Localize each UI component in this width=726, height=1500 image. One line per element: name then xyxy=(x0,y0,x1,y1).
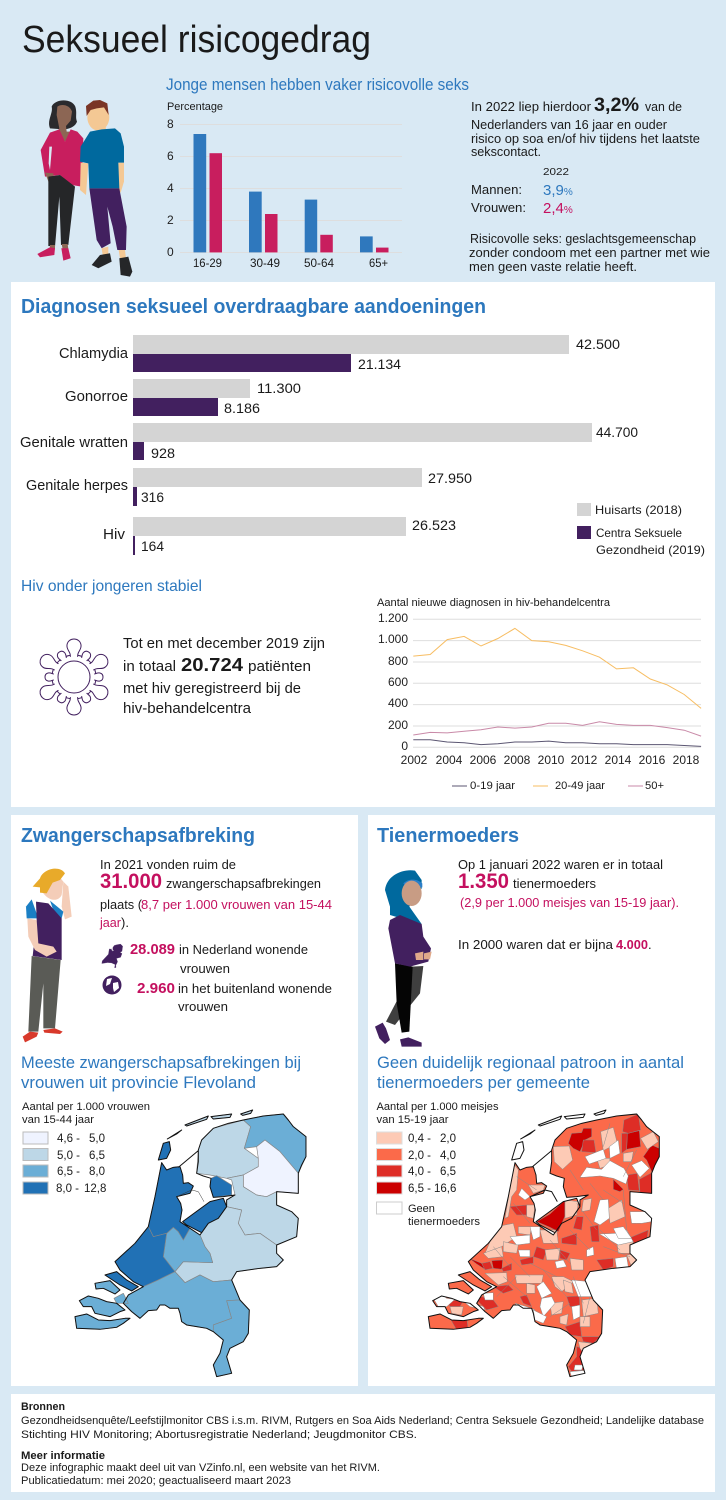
text: 1.350 teen mothers: . xyxy=(648,937,652,952)
text: definition: Risicovolle seks: geslachtsgemeenschap xyxy=(470,231,696,246)
bar chart: diagnoses by condition: 26.523 xyxy=(412,517,456,533)
text: 31.000 abortions: plaats ( xyxy=(100,897,143,912)
bar chart: diagnoses by condition: Chlamydia xyxy=(59,346,129,362)
line chart: new hiv diagnoses: 0-19 jaar xyxy=(470,780,515,792)
text: resident women: in Nederland wonende xyxy=(179,942,308,957)
legend: teen mothers rate: Aantal per 1.000 meisjes xyxy=(376,1101,499,1113)
legend: teen mothers rate: 2,0 xyxy=(440,1133,456,1145)
text: hiv patients: met hiv geregistreerd bij de xyxy=(123,680,301,697)
legend: teen mothers rate: 0,4 - xyxy=(408,1133,431,1145)
text: 3,2% at risk xyxy=(471,95,700,159)
bar chart: diagnoses by condition: Genitale herpes xyxy=(26,478,128,494)
text: 3,2% at risk: 3,2% xyxy=(594,95,639,116)
text: foreign women: vrouwen xyxy=(178,999,228,1014)
text: 1.350 teen mothers xyxy=(458,857,679,952)
bar chart: diagnoses by condition: 164 xyxy=(141,538,164,554)
bar chart: percentage by age: 2 xyxy=(167,213,174,227)
bar chart: diagnoses by condition: Genitale wratten xyxy=(20,435,128,451)
text: more information: Publicatiedatum: mei 2020; geactualiseerd maart 2023 xyxy=(21,1475,291,1487)
line chart: new hiv diagnoses xyxy=(377,597,701,792)
table: men and women 2022 xyxy=(471,166,573,217)
map: provinces xyxy=(75,1110,306,1377)
bar chart: diagnoses by condition: 928 xyxy=(151,445,175,461)
legend: abortion rate: van 15-44 jaar xyxy=(22,1114,94,1126)
heading: Flevoland: vrouwen uit provincie Flevoland xyxy=(21,1074,256,1092)
bar chart: diagnoses by condition: 27.950 xyxy=(428,470,472,486)
text: 3,2% at risk: van de xyxy=(645,99,682,114)
bar chart: percentage by age: 65+ xyxy=(369,258,388,270)
text: foreign women: 2.960 xyxy=(137,980,175,997)
text: 3,2% at risk: risico op soa en/of hiv tijdens het laatste xyxy=(471,131,700,146)
line chart: new hiv diagnoses: 200 xyxy=(388,718,408,732)
panel: teen mothers xyxy=(368,815,715,1386)
section: risky sex among young people xyxy=(37,75,710,277)
bar chart: percentage by age: 4 xyxy=(167,181,174,195)
legend: teen mothers rate: van 15-19 jaar xyxy=(376,1114,449,1126)
legend: abortion rate: Aantal per 1.000 vrouwen xyxy=(22,1101,150,1113)
text: resident women: vrouwen xyxy=(180,961,230,976)
text: 3,2% at risk: In 2022 liep hierdoor xyxy=(471,99,592,114)
bar chart: diagnoses by condition: 42.500 xyxy=(576,336,620,352)
text: sources: Bronnen xyxy=(21,1401,65,1413)
icon: virus xyxy=(38,639,110,715)
text: resident women: 28.089 xyxy=(130,941,175,958)
table: men and women 2022: Vrouwen: xyxy=(471,200,526,215)
bar chart: percentage by age: Percentage xyxy=(167,101,223,113)
heading: regional pattern: tienermoeders per gemeente xyxy=(377,1074,590,1092)
legend: abortion rate: 6,5 - xyxy=(57,1166,80,1178)
text: 31.000 abortions: zwangerschapsafbrekingen xyxy=(166,876,321,891)
legend: abortion rate: 12,8 xyxy=(84,1183,106,1195)
line chart: new hiv diagnoses: 2006 xyxy=(470,753,497,767)
text: 1.350 teen mothers: In 2000 waren dat er bijna xyxy=(458,937,614,952)
text: definition: men geen vaste relatie heeft. xyxy=(469,259,637,274)
map: municipalities xyxy=(428,1110,660,1378)
bar chart: percentage by age: 16-29 xyxy=(193,258,222,270)
line chart: new hiv diagnoses: 2012 xyxy=(571,753,598,767)
text: 31.000 abortions: 8,7 per 1.000 vrouwen van 15-44 xyxy=(141,897,332,912)
illustration: woman with blond hair xyxy=(23,869,72,1042)
legend: teen mothers rate xyxy=(376,1101,499,1228)
line chart: new hiv diagnoses: 2002 xyxy=(401,753,428,767)
legend: diagnoses: Gezondheid (2019) xyxy=(596,543,705,557)
legend: diagnoses: Huisarts (2018) xyxy=(595,503,682,517)
bar chart: diagnoses by condition: Hiv xyxy=(103,527,126,543)
text: 31.000 abortions: jaar xyxy=(99,915,122,930)
heading: diagnoses: Diagnosen seksueel overdraagbare aandoeningen xyxy=(21,296,486,318)
legend: teen mothers rate: Geen xyxy=(408,1203,435,1215)
text: 1.350 teen mothers: tienermoeders xyxy=(513,876,596,891)
text: 31.000 abortions: ). xyxy=(121,915,129,930)
line chart: new hiv diagnoses: 2016 xyxy=(639,753,666,767)
text: sources xyxy=(21,1401,704,1441)
heading: abortion: Zwangerschapsafbreking xyxy=(21,825,255,847)
icon: Netherlands xyxy=(102,944,123,968)
legend: abortion rate: 5,0 - xyxy=(57,1150,80,1162)
legend: abortion rate: 8,0 xyxy=(89,1166,105,1178)
text: more information: Meer informatie xyxy=(21,1450,105,1462)
bar chart: percentage by age: 6 xyxy=(167,149,174,163)
text: hiv patients: in totaal xyxy=(123,658,176,675)
bar chart: diagnoses by condition: 21.134 xyxy=(358,356,401,372)
bar chart: diagnoses by condition: 11.300 xyxy=(257,380,301,396)
heading: regional pattern xyxy=(377,1054,684,1092)
legend: diagnoses xyxy=(577,503,705,557)
text: hiv patients: 20.724 xyxy=(181,655,243,675)
panel: diagnoses xyxy=(11,282,715,807)
heading: hiv: Hiv onder jongeren stabiel xyxy=(21,578,202,595)
text: more information: Deze infographic maakt deel uit van VZinfo.nl, een website van het RIVM. xyxy=(21,1462,380,1474)
legend: abortion rate xyxy=(22,1101,150,1195)
line chart: new hiv diagnoses: 2018 xyxy=(673,753,700,767)
bar chart: percentage by age xyxy=(167,101,402,270)
text: hiv patients: Tot en met december 2019 zijn xyxy=(123,635,325,652)
table: men and women 2022: 3,9% xyxy=(543,182,573,199)
legend: teen mothers rate: tienermoeders xyxy=(408,1216,480,1228)
legend: teen mothers rate: 6,5 xyxy=(440,1166,456,1178)
text: 3,2% at risk: Nederlanders van 16 jaar en ouder xyxy=(471,117,668,132)
text: definition xyxy=(469,231,710,274)
text: 31.000 abortions: 31.000 xyxy=(100,870,162,893)
bar chart: diagnoses by condition: Gonorroe xyxy=(65,389,128,405)
table: men and women 2022: 2,4% xyxy=(543,200,573,217)
legend: diagnoses: Centra Seksuele xyxy=(596,526,682,540)
legend: abortion rate: 6,5 xyxy=(89,1150,105,1162)
line chart: new hiv diagnoses: 600 xyxy=(388,675,408,689)
bar chart: percentage by age: 0 xyxy=(167,245,174,259)
line chart: new hiv diagnoses: 2008 xyxy=(504,753,531,767)
legend: teen mothers rate: 16,6 xyxy=(434,1183,456,1195)
table: men and women 2022: Mannen: xyxy=(471,182,522,197)
legend: teen mothers rate: 4,0 xyxy=(440,1150,456,1162)
bar chart: diagnoses by condition: 8.186 xyxy=(224,400,260,416)
illustration: two young people xyxy=(37,100,132,277)
bar chart: diagnoses by condition: 316 xyxy=(141,489,164,505)
text: hiv patients: hiv-behandelcentra xyxy=(123,700,252,717)
line chart: new hiv diagnoses: 2004 xyxy=(436,753,463,767)
line chart: new hiv diagnoses: 1.000 xyxy=(378,632,408,646)
icon: globe xyxy=(102,976,122,994)
text: sources: Stichting HIV Monitoring; Abortusregistratie Nederland; Jeugdmonitor CBS. xyxy=(21,1429,417,1441)
legend: teen mothers rate: 4,0 - xyxy=(408,1166,431,1178)
heading: regional pattern: Geen duidelijk regionaal patroon in aantal xyxy=(377,1054,684,1072)
text: resident women xyxy=(130,941,308,976)
line chart: new hiv diagnoses: 20-49 jaar xyxy=(555,780,605,792)
text: hiv patients: patiënten xyxy=(248,658,311,675)
legend: abortion rate: 4,6 - xyxy=(57,1133,80,1145)
text: foreign women xyxy=(137,980,332,1014)
table: men and women 2022: 2022 xyxy=(543,166,569,178)
line chart: new hiv diagnoses: 400 xyxy=(388,696,408,710)
line chart: new hiv diagnoses: 2010 xyxy=(538,753,565,767)
line chart: new hiv diagnoses: 50+ xyxy=(645,780,664,792)
panel: abortion xyxy=(11,815,358,1386)
line chart: new hiv diagnoses: Aantal nieuwe diagnosen in hiv-behandelcentra xyxy=(377,597,611,609)
text: 1.350 teen mothers: Op 1 januari 2022 waren er in totaal xyxy=(458,857,663,872)
text: hiv patients xyxy=(123,635,325,717)
illustration: woman with headscarf xyxy=(375,870,432,1047)
heading: Flevoland: Meeste zwangerschapsafbrekingen bij xyxy=(21,1054,301,1072)
line chart: new hiv diagnoses: 1.200 xyxy=(378,611,408,625)
legend: abortion rate: 5,0 xyxy=(89,1133,105,1145)
text: 3,2% at risk: sekscontact. xyxy=(471,144,541,159)
text: 1.350 teen mothers: (2,9 per 1.000 meisjes van 15-19 jaar). xyxy=(460,895,679,910)
text: 31.000 abortions xyxy=(99,857,332,930)
bar chart: diagnoses by condition xyxy=(20,335,638,555)
bar chart: diagnoses by condition: 44.700 xyxy=(596,424,638,440)
legend: teen mothers rate: 2,0 - xyxy=(408,1150,431,1162)
line chart: new hiv diagnoses: 0 xyxy=(401,739,408,753)
text: definition: zonder condoom met een partner met wie xyxy=(469,245,710,260)
legend: abortion rate: 8,0 - xyxy=(56,1183,79,1195)
heading: teen mothers: Tienermoeders xyxy=(377,825,519,847)
legend: teen mothers rate: 6,5 - xyxy=(408,1183,431,1195)
text: foreign women: in het buitenland wonende xyxy=(178,981,332,996)
line chart: new hiv diagnoses: 800 xyxy=(388,654,408,668)
line chart: new hiv diagnoses: 2014 xyxy=(605,753,632,767)
heading: Flevoland xyxy=(21,1054,301,1092)
heading: young people: Jonge mensen hebben vaker risicovolle seks xyxy=(166,75,469,94)
text: 1.350 teen mothers: 1.350 xyxy=(458,870,509,893)
title: Seksueel risicogedrag xyxy=(22,19,371,61)
text: 31.000 abortions: In 2021 vonden ruim de xyxy=(100,857,236,872)
panel: sources xyxy=(11,1394,715,1492)
text: more information xyxy=(21,1450,380,1487)
bar chart: percentage by age: 8 xyxy=(167,117,174,131)
bar chart: percentage by age: 30-49 xyxy=(250,258,280,270)
bar chart: percentage by age: 50-64 xyxy=(304,258,335,270)
text: sources: Gezondheidsenquête/Leefstijlmonitor CBS i.s.m. RIVM, Rutgers en Soa Aids Nederland; Centra Seksuele Gezondheid; Landelijke database xyxy=(21,1415,704,1427)
text: 1.350 teen mothers: 4.000 xyxy=(616,937,648,952)
